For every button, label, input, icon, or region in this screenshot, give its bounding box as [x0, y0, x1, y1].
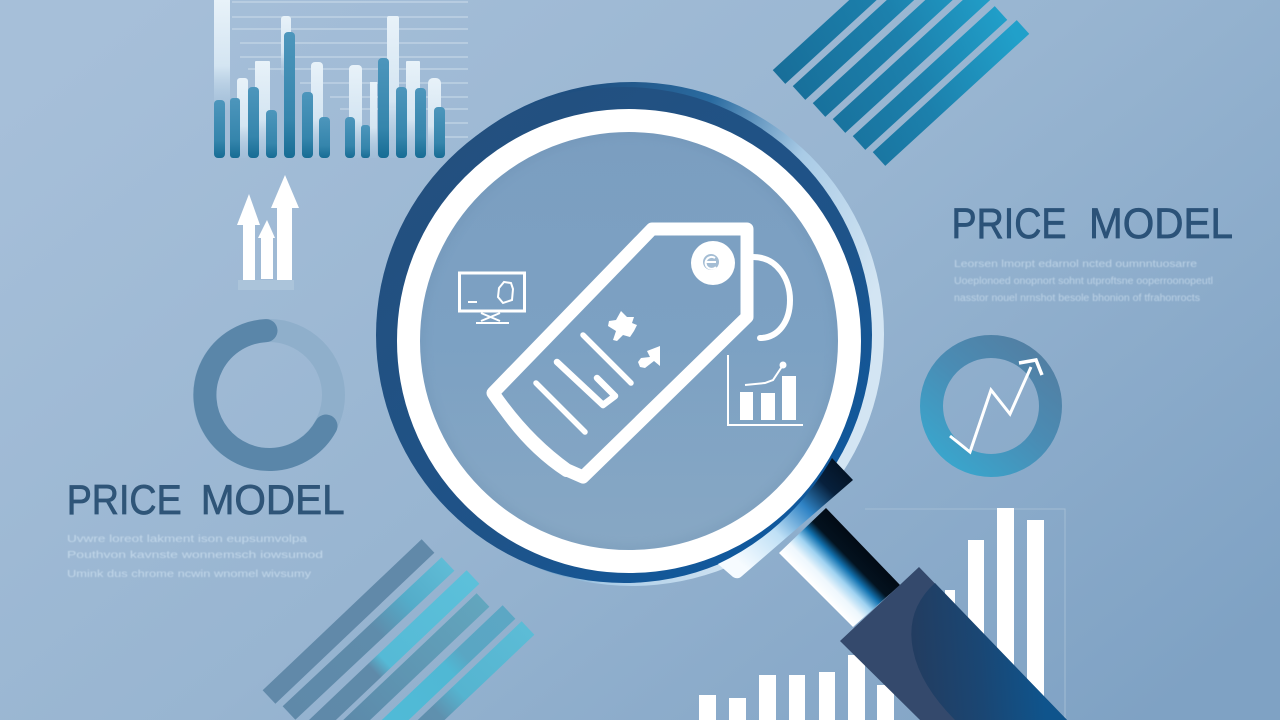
tag arrow [638, 346, 660, 368]
handle grip [840, 567, 1067, 720]
icon: mini bar chart [728, 355, 803, 425]
title: upper right: PRICE [952, 200, 1066, 248]
title: lower left [67, 476, 345, 523]
icon: price tag [493, 229, 790, 477]
text block: lower left [67, 534, 323, 580]
tag eyelet [691, 241, 735, 285]
title: lower left: PRICE [67, 476, 182, 523]
text block: upper right [954, 259, 1213, 304]
lens outer ring [376, 82, 884, 586]
tag star mark [608, 311, 637, 341]
handle neck [779, 508, 900, 627]
bar chart: bottom right [699, 508, 1065, 720]
text block: upper right: nasstor nouel nrnshot besole bhonion of tfrahonrocts [954, 293, 1200, 304]
text block: lower left: Pouthvon kavnste wonnemsch iowsumod [67, 550, 323, 561]
title: upper right: MODEL [1089, 200, 1233, 248]
donut chart: left [204, 330, 334, 460]
lens glass [411, 123, 847, 559]
text block: upper right: Uoeplonoed onopnort sohnt utproftsne ooperroonopeutl [954, 276, 1213, 287]
title: lower left: MODEL [201, 476, 345, 523]
tag text lines [536, 335, 631, 432]
icon: three up arrows [237, 175, 299, 290]
diagonal bars: top right [773, 0, 1029, 166]
title: upper right [952, 200, 1233, 248]
handle collar [718, 458, 853, 578]
lens white rim [408, 120, 850, 562]
text block: lower left: Uvwre loreot lakment ison eupsumvolpa [67, 534, 308, 545]
magnifying glass [376, 82, 1067, 720]
donut icon: rising line [932, 346, 1050, 466]
tag string [753, 257, 790, 338]
text block: upper right: Leorsen lmorpt edarnol ncted oumnntuosarre [954, 259, 1198, 270]
text block: lower left: Umink dus chrome ncwin wnomel wivsumy [67, 569, 311, 580]
icon: monitor [460, 273, 524, 323]
bar chart: top left [214, 0, 468, 158]
diagonal bars: bottom left [263, 539, 534, 720]
